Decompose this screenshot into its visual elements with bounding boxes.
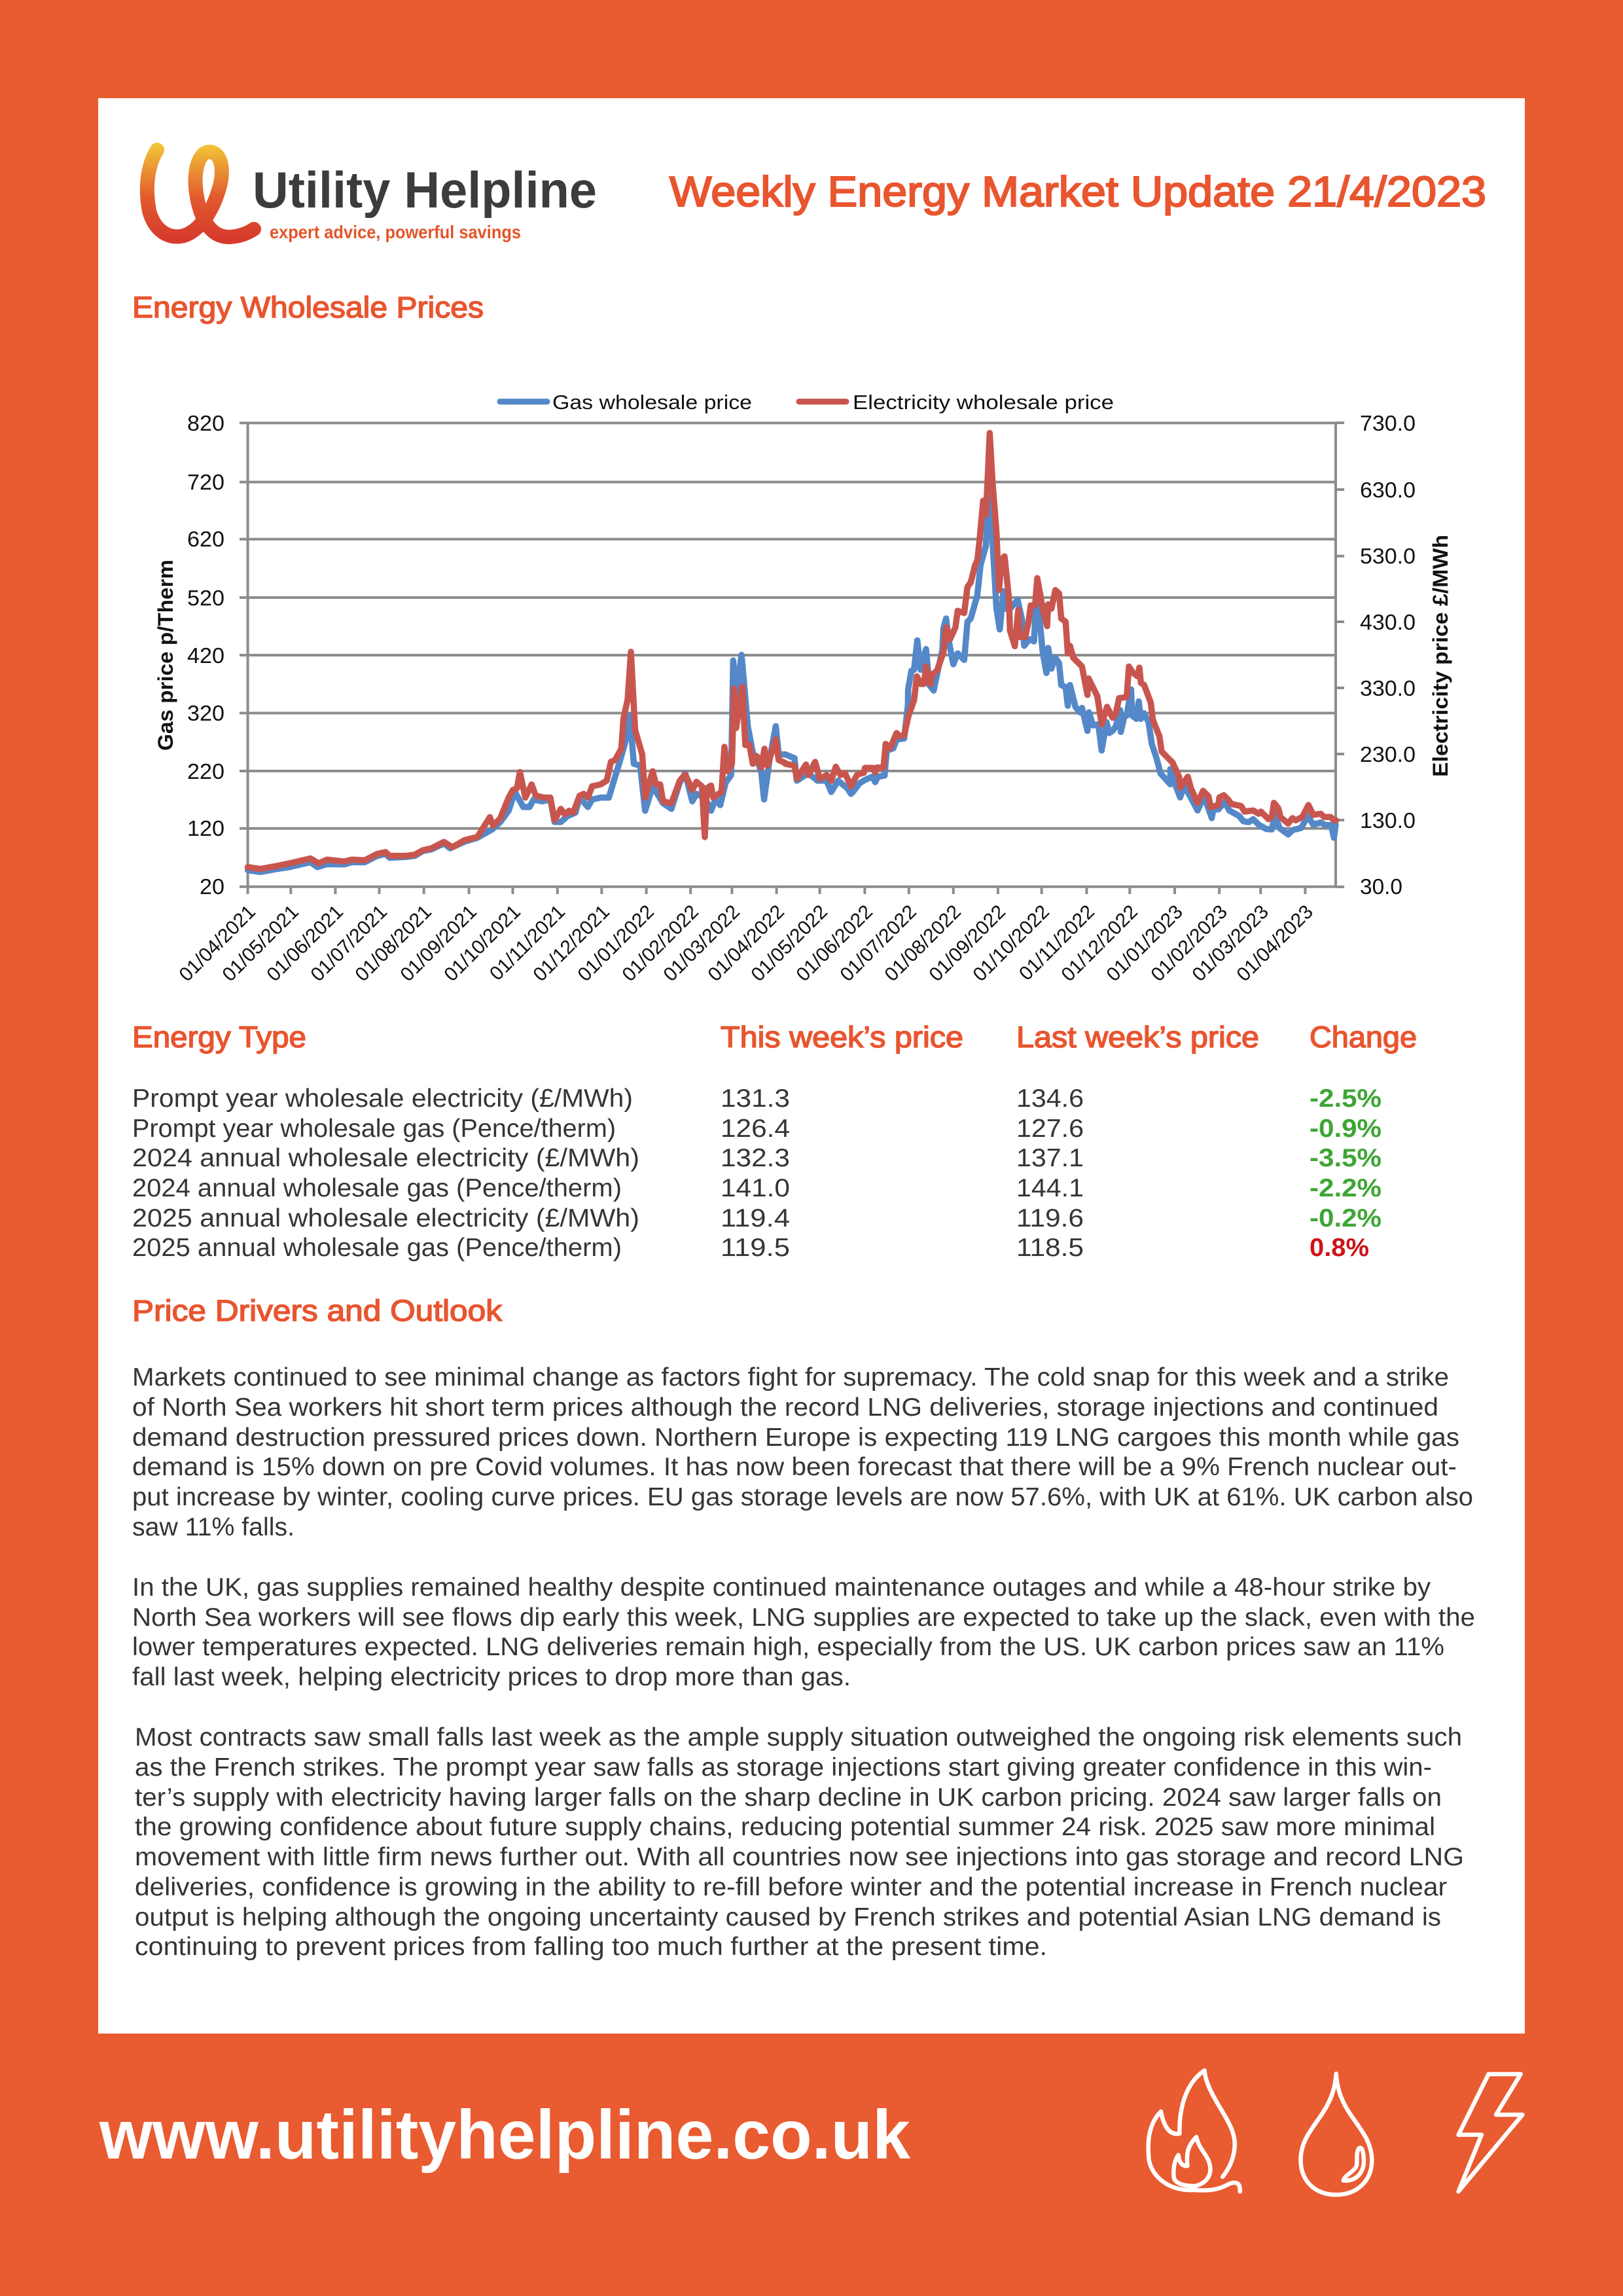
x axis date labels: 01/04/2023 bbox=[1232, 901, 1317, 986]
right axis labels: 630.0 bbox=[1360, 478, 1416, 502]
line chart: gas and electricity wholesale prices bbox=[154, 391, 1452, 986]
x axis date labels: 01/11/2021 bbox=[486, 901, 569, 985]
x axis date labels: 01/05/2022 bbox=[747, 901, 832, 986]
x axis date labels: 01/05/2021 bbox=[218, 901, 303, 986]
paragraph 3: as the French strikes. The prompt year saw falls as storage injections start giving greater confidence in this win- bbox=[135, 1753, 1432, 1782]
x axis date labels: 01/10/2022 bbox=[969, 901, 1054, 986]
row: prompt year electricity bbox=[132, 1085, 1382, 1113]
paragraph 3: movement with little firm news further out. With all countries now see injections into gas storage and record LNG bbox=[135, 1843, 1464, 1871]
row: 2024 gas: -2.2% bbox=[1310, 1174, 1382, 1202]
x axis date labels: 01/06/2021 bbox=[262, 901, 348, 986]
row: prompt year electricity: 131.3 bbox=[721, 1085, 790, 1113]
electricity price series bbox=[248, 433, 1336, 869]
right axis labels: 530.0 bbox=[1360, 544, 1416, 568]
right axis labels bbox=[1360, 411, 1416, 899]
row: 2025 electricity: 119.4 bbox=[721, 1204, 790, 1232]
legend: electricity bbox=[799, 399, 846, 404]
row: 2025 gas: 0.8% bbox=[1310, 1234, 1369, 1262]
left axis labels: 20 bbox=[200, 874, 224, 899]
paragraph 1: demand destruction pressured prices down. Northern Europe is expecting 119 LNG cargoes this month while gas bbox=[132, 1424, 1459, 1452]
white content panel bbox=[98, 98, 1525, 2034]
heading: Energy Wholesale Prices: Energy Wholesale Prices bbox=[132, 291, 484, 324]
x axis date labels: 01/01/2022 bbox=[573, 901, 658, 986]
x axis date labels: 01/07/2021 bbox=[306, 901, 391, 986]
right axis labels: 430.0 bbox=[1360, 610, 1416, 634]
gas price series bbox=[248, 484, 1336, 872]
logo tagline: expert advice, powerful savings bbox=[270, 222, 521, 242]
row: prompt year gas: 126.4 bbox=[721, 1115, 790, 1143]
x axis date labels: 01/08/2022 bbox=[880, 901, 965, 986]
legend bbox=[500, 391, 1114, 414]
table header: Last week’s price bbox=[1016, 1020, 1259, 1054]
row: 2024 gas: 144.1 bbox=[1016, 1174, 1084, 1202]
paragraph 2: lower temperatures expected. LNG deliveries remain high, especially from the US. UK carbon prices saw an 11% bbox=[132, 1633, 1444, 1661]
x axis date labels: 01/09/2022 bbox=[925, 901, 1010, 986]
right axis labels: 130.0 bbox=[1360, 808, 1416, 833]
row: 2025 gas: 2025 annual wholesale gas (Pence/therm) bbox=[132, 1234, 622, 1262]
x axis date labels: 01/03/2023 bbox=[1188, 901, 1273, 986]
left axis labels: 820 bbox=[187, 411, 224, 435]
x axis date labels: 01/06/2022 bbox=[792, 901, 877, 986]
row: 2025 gas bbox=[132, 1234, 1369, 1262]
x axis date labels bbox=[175, 901, 1317, 986]
paragraph 3: output is helping although the ongoing uncertainty caused by French strikes and potential Asian LNG demand is bbox=[135, 1903, 1441, 1931]
paragraph 1 bbox=[132, 1363, 1473, 1541]
right axis labels: 230.0 bbox=[1360, 742, 1416, 766]
legend label: gas: Gas wholesale price bbox=[552, 391, 752, 414]
row: 2024 electricity: 137.1 bbox=[1016, 1144, 1084, 1172]
paragraph 1: of North Sea workers hit short term prices although the record LNG deliveries, storage injections and continued bbox=[132, 1393, 1438, 1422]
x axis date labels: 01/08/2021 bbox=[351, 901, 436, 986]
x axis date labels: 01/04/2022 bbox=[704, 901, 789, 986]
row: 2025 electricity bbox=[132, 1204, 1382, 1232]
left axis labels bbox=[187, 411, 224, 899]
footer website URL: www.utilityhelpline.co.uk bbox=[99, 2096, 911, 2174]
row: 2025 electricity: 2025 annual wholesale electricity (£/MWh) bbox=[132, 1204, 639, 1232]
paragraph 3: deliveries, confidence is growing in the ability to re-fill before winter and the potential increase in French nuclear bbox=[135, 1873, 1447, 1901]
row: 2024 electricity: 2024 annual wholesale electricity (£/MWh) bbox=[132, 1144, 639, 1172]
left axis labels: 420 bbox=[187, 643, 224, 668]
row: prompt year gas: -0.9% bbox=[1310, 1115, 1382, 1143]
icon: water drop bbox=[1301, 2073, 1372, 2195]
row: prompt year gas: Prompt year wholesale gas (Pence/therm) bbox=[132, 1115, 616, 1143]
title: Weekly Energy Market Update 21/4/2023 bbox=[669, 168, 1486, 215]
x axis date labels: 01/10/2021 bbox=[440, 901, 525, 986]
row: prompt year electricity: -2.5% bbox=[1310, 1085, 1382, 1113]
icon: lightning bolt bbox=[1459, 2074, 1522, 2191]
x axis date labels: 01/03/2022 bbox=[659, 901, 744, 986]
paragraph 2: North Sea workers will see flows dip early this week, LNG supplies are expected to take up the slack, even with the bbox=[132, 1604, 1475, 1632]
left axis labels: 720 bbox=[187, 470, 224, 494]
left axis labels: 620 bbox=[187, 527, 224, 551]
heading: Price Drivers and Outlook: Price Drivers and Outlook bbox=[132, 1294, 503, 1327]
right axis labels: 30.0 bbox=[1360, 874, 1402, 899]
row: 2025 gas: 118.5 bbox=[1016, 1234, 1084, 1262]
table header bbox=[132, 1020, 1417, 1054]
row: 2024 gas bbox=[132, 1174, 1382, 1202]
row: 2024 electricity: 132.3 bbox=[721, 1144, 790, 1172]
x axis date labels: 01/02/2022 bbox=[618, 901, 703, 986]
left axis labels: 220 bbox=[187, 759, 224, 783]
paragraph 1: put increase by winter, cooling curve prices. EU gas storage levels are now 57.6%, with UK at 61%. UK carbon also bbox=[132, 1483, 1473, 1511]
x axis date labels: 01/12/2022 bbox=[1057, 901, 1142, 986]
row: 2024 gas: 2024 annual wholesale gas (Pence/therm) bbox=[132, 1174, 622, 1202]
legend: gas bbox=[500, 399, 547, 404]
table header: This week’s price bbox=[721, 1020, 963, 1054]
left axis labels: 320 bbox=[187, 701, 224, 725]
icon: flame bbox=[1149, 2070, 1240, 2191]
right axis labels: 330.0 bbox=[1360, 676, 1416, 700]
paragraph 2: In the UK, gas supplies remained healthy despite continued maintenance outages and while a 48-hour strike by bbox=[132, 1573, 1431, 1602]
logo icon: looped U bbox=[147, 150, 254, 237]
price table bbox=[132, 1020, 1417, 1262]
paragraph 1: demand is 15% down on pre Covid volumes. It has now been forecast that there will be a 9% French nuclear out- bbox=[132, 1453, 1457, 1481]
paragraph 2 bbox=[132, 1573, 1475, 1691]
x axis date labels: 01/04/2021 bbox=[175, 901, 260, 986]
row: prompt year gas bbox=[132, 1115, 1382, 1143]
x axis date labels: 01/01/2023 bbox=[1102, 901, 1187, 986]
x axis date labels: 01/09/2021 bbox=[396, 901, 481, 986]
paragraph 3 bbox=[135, 1723, 1464, 1961]
row: 2024 electricity bbox=[132, 1144, 1382, 1172]
paragraph 3: Most contracts saw small falls last week as the ample supply situation outweighed the ongoing risk elements such bbox=[135, 1723, 1462, 1751]
legend label: electricity: Electricity wholesale price bbox=[853, 391, 1114, 414]
left axis title: Gas price p/Therm bbox=[154, 560, 177, 751]
gridlines and axes bbox=[240, 423, 1344, 894]
table header: Change bbox=[1310, 1020, 1417, 1054]
logo: Utility Helpline bbox=[147, 150, 597, 242]
right axis labels: 730.0 bbox=[1360, 411, 1416, 435]
logo wordmark: Utility Helpline bbox=[253, 161, 597, 219]
x axis date labels: 01/07/2022 bbox=[836, 901, 921, 986]
paragraph 1: saw 11% falls. bbox=[132, 1513, 294, 1541]
paragraph 2: fall last week, helping electricity prices to drop more than gas. bbox=[132, 1663, 851, 1691]
right axis title: Electricity price £/MWh bbox=[1429, 535, 1452, 777]
row: prompt year electricity: 134.6 bbox=[1016, 1085, 1084, 1113]
paragraph 3: ter’s supply with electricity having larger falls on the sharp decline in UK carbon pricing. 2024 saw larger falls on bbox=[135, 1784, 1442, 1812]
left axis labels: 120 bbox=[187, 816, 224, 840]
row: 2025 electricity: -0.2% bbox=[1310, 1204, 1382, 1232]
paragraph 1: Markets continued to see minimal change as factors fight for supremacy. The cold snap for this week and a strike bbox=[132, 1363, 1449, 1391]
left axis labels: 520 bbox=[187, 586, 224, 610]
row: prompt year gas: 127.6 bbox=[1016, 1115, 1084, 1143]
row: 2024 gas: 141.0 bbox=[721, 1174, 790, 1202]
table header: Energy Type bbox=[132, 1020, 306, 1054]
row: prompt year electricity: Prompt year wholesale electricity (£/MWh) bbox=[132, 1085, 633, 1113]
row: 2025 gas: 119.5 bbox=[721, 1234, 790, 1262]
paragraph 3: continuing to prevent prices from falling too much further at the present time. bbox=[135, 1933, 1047, 1961]
x axis date labels: 01/11/2022 bbox=[1015, 901, 1099, 985]
x axis date labels: 01/02/2023 bbox=[1147, 901, 1232, 986]
row: 2024 electricity: -3.5% bbox=[1310, 1144, 1382, 1172]
paragraph 3: the growing confidence about future supply chains, reducing potential summer 24 risk. 2025 saw more minimal bbox=[135, 1813, 1435, 1841]
row: 2025 electricity: 119.6 bbox=[1016, 1204, 1084, 1232]
x axis date labels: 01/12/2021 bbox=[529, 901, 614, 986]
